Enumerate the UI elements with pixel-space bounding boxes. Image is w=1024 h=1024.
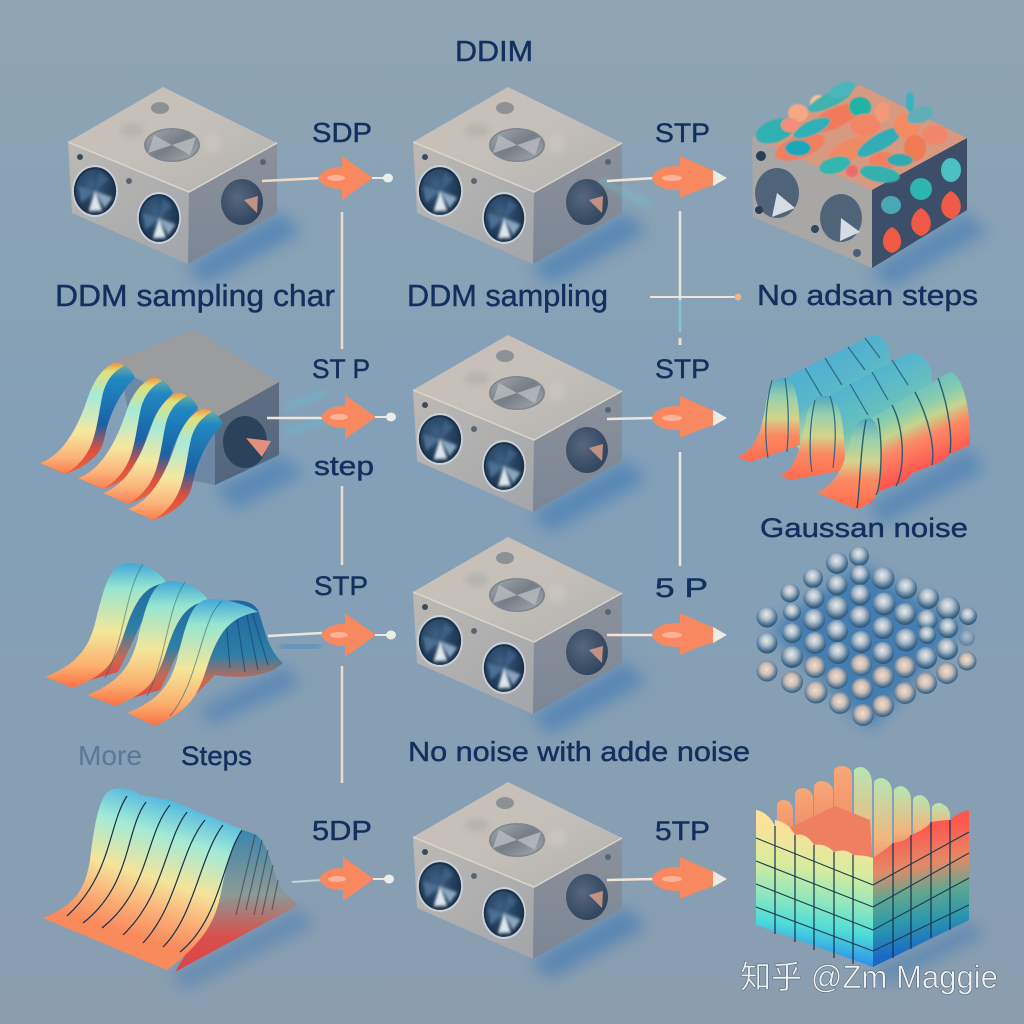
connector: column 1 upper bbox=[341, 212, 343, 349]
icon: metal block row 1 column 2 bbox=[413, 87, 647, 284]
label: 5 P row 3 column 2: 5 P bbox=[655, 573, 708, 603]
icon: ridged waves row 2 column 3 bbox=[737, 335, 985, 525]
arrow: row 2 column 2 bbox=[607, 396, 727, 438]
icon: metal block row 2 column 2 bbox=[413, 335, 647, 532]
arrow: row 1 column 1 bbox=[262, 156, 393, 200]
arrow: row 2 column 1 bbox=[267, 392, 396, 439]
arrow: row 4 column 1 bbox=[292, 857, 394, 901]
icon: metal block row 3 column 2 bbox=[413, 537, 647, 734]
middle ridge bbox=[780, 353, 932, 480]
left face bbox=[756, 810, 873, 967]
noisy coloured top bbox=[752, 78, 948, 185]
label: No noise with adde noise: No noise with adde noise bbox=[408, 736, 750, 767]
icon: gaussian noise spheres bbox=[756, 546, 977, 728]
label: DDM sampling: DDM sampling bbox=[407, 278, 608, 313]
ridge lines bbox=[67, 796, 278, 952]
label: ST P: ST P bbox=[312, 354, 370, 384]
red and teal drops bbox=[881, 158, 961, 253]
ridges bbox=[40, 363, 223, 520]
back panels bbox=[777, 766, 950, 880]
label: STP row 1: STP bbox=[655, 118, 710, 148]
connector: column 2 upper bbox=[650, 211, 742, 345]
label: More: More bbox=[78, 740, 142, 771]
arrow: row 3 column 2 bbox=[607, 613, 727, 655]
icon: noisy block row 1 column 3 bbox=[752, 78, 988, 288]
right face bbox=[873, 810, 969, 967]
label: 5TP: 5TP bbox=[655, 816, 710, 846]
connector: column 1 lower bbox=[341, 666, 343, 783]
arrow: row 4 column 2 bbox=[607, 857, 727, 899]
label: DDM sampling char: DDM sampling char bbox=[55, 278, 335, 313]
arrow: row 3 column 1 bbox=[268, 613, 396, 657]
icon: metal block row 1 column 1 bbox=[68, 87, 302, 284]
label: STP row 3 column 1: STP bbox=[314, 571, 368, 601]
label: STP row 2: STP bbox=[655, 354, 710, 384]
icon: metal block row 4 column 2 bbox=[413, 782, 647, 979]
back ridge bbox=[737, 335, 890, 462]
arrow: row 1 column 2 bbox=[600, 156, 727, 205]
icon: wave ribbons row 3 column 1 bbox=[45, 563, 300, 726]
front ridge bbox=[817, 372, 970, 509]
icon: coloured grid cube bbox=[756, 766, 985, 985]
watermark: 知乎 @Zm Maggie bbox=[740, 959, 998, 995]
label: No adsan steps: No adsan steps bbox=[757, 280, 978, 312]
connector: column 1 middle bbox=[341, 486, 343, 565]
icon: block row 2 column 1 with waves bbox=[40, 330, 304, 520]
third ribbon with open interior bbox=[127, 599, 283, 726]
title: DDIM bbox=[455, 36, 533, 68]
icon: large wave row 4 column 1 bbox=[43, 788, 315, 990]
connector: column 2 middle bbox=[679, 452, 681, 566]
label: Gaussan noise: Gaussan noise bbox=[760, 513, 968, 543]
label: SDP: SDP bbox=[312, 117, 372, 148]
label: Steps: Steps bbox=[181, 741, 252, 771]
label: step: step bbox=[314, 451, 374, 481]
label: 5DP: 5DP bbox=[312, 815, 372, 846]
